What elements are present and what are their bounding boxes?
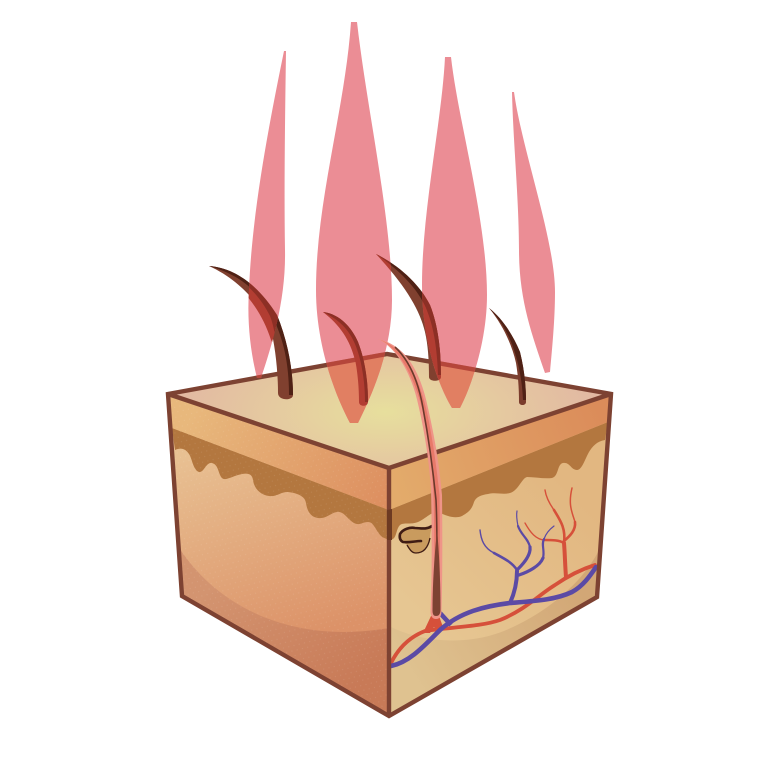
icon: sebaceous gland [399,526,432,553]
pigment overlap at front edge [387,509,392,540]
lower dermis shading, left face [178,546,389,716]
flame 3 [422,57,487,408]
panel: block outline [168,354,611,716]
lower dermis shading, right face [389,548,600,716]
hair 4 [489,308,526,405]
pigmented layer, left face [172,428,389,540]
panel: top surface of skin [168,354,611,468]
pigmented layer, right face [389,422,608,540]
flame 4 [512,92,555,373]
epidermis band, right face [389,396,609,510]
hair 3 [376,254,441,381]
hair follicle with root crossing the skin [378,339,442,619]
illustration: skin block with hairs and flames [166,22,614,718]
panel: left face of skin block [168,394,389,716]
panel: right face of skin block [389,394,611,716]
hair 1 [209,266,293,399]
chart: veins in blue [391,511,596,666]
flame overlap tinting surface, edge and hairs [248,254,476,423]
flames: four rising pink heat plumes [248,22,555,423]
flame 2 [316,22,392,423]
flame 1 [248,51,286,378]
hair 2 [323,312,368,406]
epidermis band, left face [170,396,389,510]
chart: arteries in red [391,488,595,663]
